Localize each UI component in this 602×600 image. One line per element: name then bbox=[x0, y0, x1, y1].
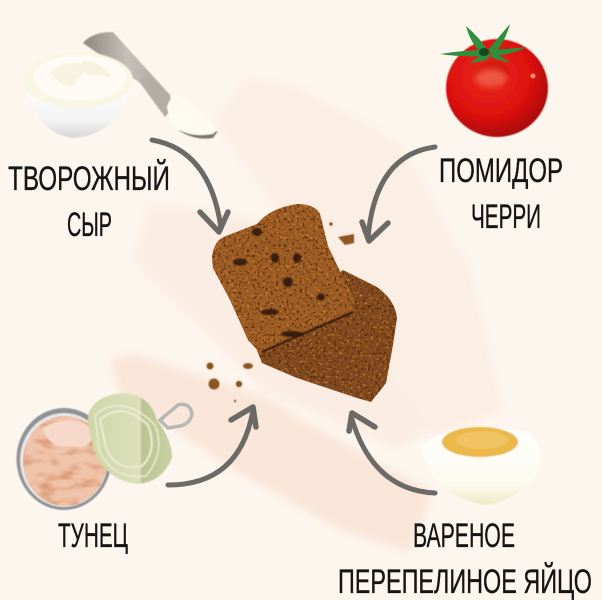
illustration: bread slices bbox=[212, 204, 397, 402]
label: quail egg bbox=[338, 517, 592, 600]
bowl bbox=[23, 52, 133, 138]
lid bbox=[88, 393, 172, 484]
label: quail egg: ВАРЕНОЕ bbox=[413, 517, 515, 555]
icon: cream cheese with knife bbox=[23, 32, 218, 139]
brush strokes background bbox=[110, 77, 503, 553]
arrow: cream cheese to bread bbox=[152, 140, 228, 232]
pull tab bbox=[160, 404, 192, 428]
arrow: egg to bread bbox=[349, 413, 435, 493]
arrow: tuna to bread bbox=[168, 407, 256, 485]
front slice bbox=[212, 204, 355, 353]
icon: canned tuna bbox=[16, 393, 192, 510]
stem and leaves bbox=[440, 24, 527, 63]
raisins bbox=[233, 228, 325, 337]
arrow: tomato to bread bbox=[362, 147, 435, 241]
label: cream cheese bbox=[8, 160, 170, 244]
label: cream cheese: СЫР bbox=[67, 206, 112, 244]
can bbox=[16, 408, 112, 510]
crumbs bbox=[206, 222, 354, 402]
label: cherry tomato bbox=[439, 152, 563, 236]
icon: cherry tomato bbox=[440, 24, 548, 137]
knife bbox=[83, 32, 218, 139]
crust shadow bbox=[262, 312, 353, 352]
label: cherry tomato: ЧЕРРИ bbox=[471, 198, 541, 236]
back slice bbox=[255, 270, 397, 402]
label: tuna: ТУНЕЦ bbox=[58, 517, 128, 555]
icon: boiled egg bbox=[421, 427, 541, 505]
label: cream cheese: ТВОРОЖНЫЙ bbox=[8, 160, 170, 198]
